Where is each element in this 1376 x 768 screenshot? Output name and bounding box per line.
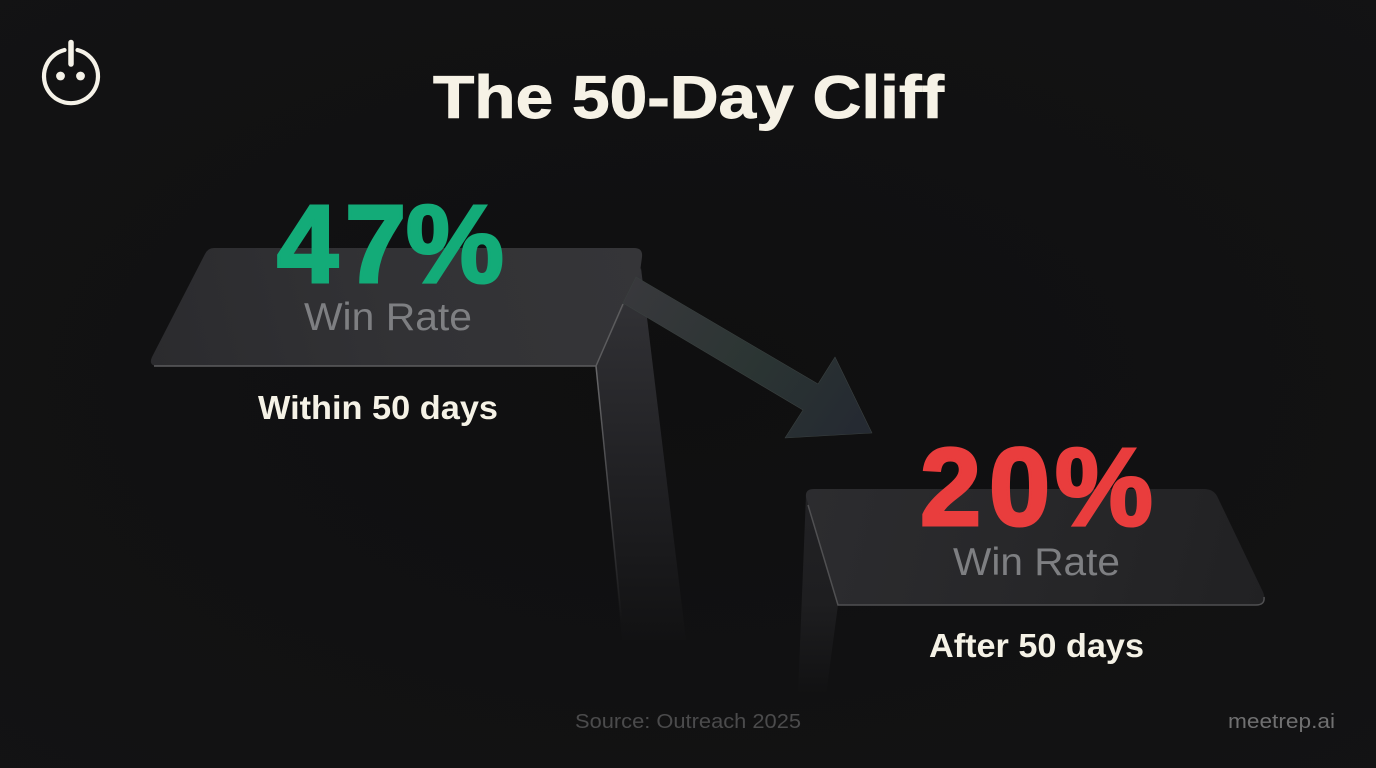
icon: power plug logo <box>44 42 98 103</box>
pillar: right cliff face <box>798 495 838 695</box>
stat: 20 percent: 20% <box>920 426 1153 549</box>
brand url: meetrep.ai <box>1228 711 1335 733</box>
panel: after 50 days platform <box>806 426 1264 605</box>
pillar: left cliff face <box>596 268 686 640</box>
label: win rate left: Win Rate <box>304 296 472 339</box>
caption: after 50 days: After 50 days <box>929 627 1144 664</box>
label: win rate right: Win Rate <box>953 541 1120 584</box>
panel: within 50 days platform <box>151 183 642 366</box>
arrow: downward from 47% to 20% <box>623 277 872 438</box>
caption: within 50 days: Within 50 days <box>258 389 498 426</box>
source note: Source: Outreach 2025 <box>575 711 801 733</box>
title: The 50-Day Cliff <box>433 64 945 131</box>
stat: 47 percent: 47% <box>277 183 504 306</box>
